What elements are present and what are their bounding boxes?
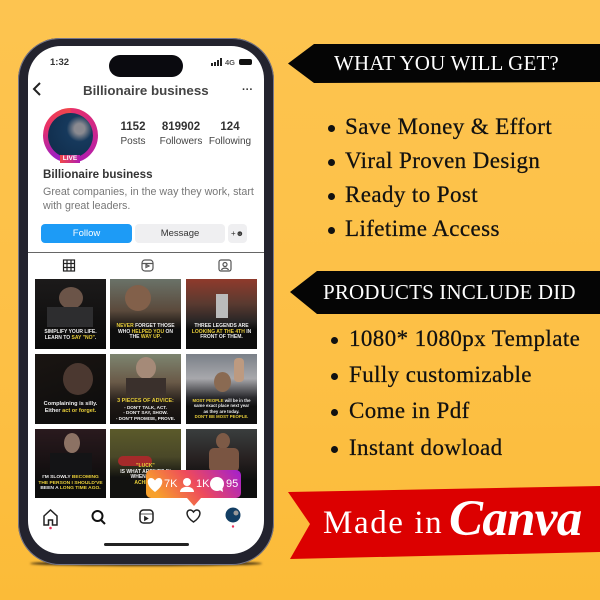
banner text: WHAT YOU WILL GET?	[334, 51, 559, 75]
bullet: template size: 1080* 1080px Template	[349, 326, 580, 351]
post 3: LOOKING AT THE 4TH IN	[192, 329, 251, 335]
profile title: Billionaire business	[83, 83, 209, 98]
post 4	[35, 354, 106, 424]
icon: home	[44, 510, 57, 529]
banner: made in canva	[288, 486, 600, 559]
phone screen	[28, 46, 264, 554]
followers count: 1K	[196, 478, 209, 490]
banner shape	[290, 271, 600, 314]
post 7: BEEN A LONG TIME AGO.	[40, 486, 101, 491]
post 3: THREE LEGENDS ARE	[194, 323, 249, 329]
benefits list	[328, 114, 552, 241]
bottom nav	[43, 508, 240, 530]
post 5: - DON'T PROMISE, PROVE.	[116, 416, 175, 421]
home indicator	[104, 543, 189, 546]
phone shadow	[30, 561, 262, 566]
tab icons	[62, 259, 232, 272]
canva text: Canva	[449, 491, 582, 547]
add friend button	[228, 224, 247, 243]
avatar photo	[48, 113, 93, 158]
post 8: IS WHAT ARRIVES IN	[120, 469, 171, 475]
post 6: same exact place next year	[194, 403, 249, 408]
post 2: NEVER FORGET THOSE	[116, 323, 175, 329]
post 5: 3 PIECES OF ADVICE:	[117, 398, 174, 404]
followers stat	[160, 121, 202, 147]
icon: heart	[187, 510, 200, 522]
post 2: THE WAY UP.	[130, 334, 161, 340]
status time: 1:32	[50, 57, 69, 68]
bullet: instant download: Instant dowload	[349, 435, 503, 460]
post 6: DON'T BE MOST PEOPLE.	[195, 414, 248, 419]
status icons: 4G	[225, 58, 235, 67]
post grid	[35, 279, 257, 498]
post 1	[35, 279, 106, 349]
post 5: - DON'T SAY, SHOW.	[123, 410, 168, 415]
bio text: Great companies, in the way they work, start	[43, 186, 254, 198]
message button	[135, 224, 225, 243]
post 8	[110, 429, 181, 498]
post 3	[186, 279, 257, 349]
bullet: customizable: Fully customizable	[349, 362, 532, 387]
following stat	[209, 121, 251, 147]
post 1: SIMPLIFY YOUR LIFE.	[44, 329, 97, 335]
likes count: 7K	[164, 478, 177, 490]
posts stat: 1152	[121, 121, 145, 133]
divider	[28, 252, 264, 253]
following stat: Following	[209, 136, 251, 147]
followers stat: Followers	[160, 136, 202, 147]
bullet: pdf: Come in Pdf	[349, 398, 470, 423]
follow button	[41, 224, 132, 243]
add friend button: +☻	[231, 229, 244, 238]
post 9	[186, 429, 257, 498]
post 5	[110, 354, 181, 424]
icon: reels	[140, 510, 153, 523]
phone body	[18, 38, 274, 565]
icon: search	[92, 511, 105, 524]
banner shape	[288, 44, 600, 83]
avatar	[43, 108, 98, 163]
post 6	[186, 354, 257, 424]
post 8: "LUCK"	[136, 463, 155, 469]
status icons	[211, 58, 252, 67]
following stat: 124	[220, 121, 240, 133]
banner: products include	[290, 271, 600, 314]
post 4: Complaining is silly.	[44, 401, 97, 407]
comments count: 95	[226, 478, 238, 490]
bio text	[43, 186, 254, 212]
bullet: lifetime access: Lifetime Access	[345, 216, 500, 241]
post 7: THE PERSON I SHOULD'VE	[38, 481, 103, 486]
bullet: viral design: Viral Proven Design	[345, 148, 540, 173]
post 7: I'M SLOWLY BECOMING	[42, 475, 99, 480]
tooltip bubble	[146, 470, 241, 506]
followers stat: 819902	[162, 121, 200, 133]
products list	[331, 326, 580, 460]
post 4: Either act or forget.	[45, 408, 96, 414]
bio name: Billionaire business	[43, 168, 153, 181]
live badge	[60, 155, 80, 163]
posts stat: Posts	[120, 136, 146, 147]
more menu: ···	[242, 84, 253, 96]
bio text: with great leaders.	[43, 200, 130, 212]
bullet: ready to post: Ready to Post	[345, 182, 478, 207]
banner: what you will get	[288, 44, 600, 83]
live badge: LIVE	[63, 155, 77, 162]
post 8: WHEN THEY	[130, 474, 160, 480]
post 5: - DON'T TALK, ACT.	[124, 405, 167, 410]
post 2: WHO HELPED YOU ON	[118, 329, 173, 335]
message button: Message	[161, 228, 199, 239]
bullet: save money: Save Money & Effort	[345, 114, 552, 139]
post 2	[110, 279, 181, 349]
icon: profile	[226, 508, 240, 528]
post 8: ACHIEVE	[134, 480, 157, 486]
banner text: PRODUCTS INCLUDE DID	[323, 280, 576, 304]
post 6: as they are today.	[204, 409, 239, 414]
engagement tooltip	[146, 470, 241, 506]
posts stat	[120, 121, 146, 147]
post 3: FRONT OF THEM.	[200, 334, 243, 340]
post 1: LEARN TO SAY "NO".	[45, 335, 96, 341]
back arrow	[32, 82, 41, 96]
ribbon shape	[288, 486, 600, 559]
post 6: MOST PEOPLE will be in the	[192, 398, 251, 403]
dynamic island	[109, 55, 183, 77]
made in text: Made in	[323, 505, 443, 541]
post 7	[35, 429, 106, 498]
follow button: Follow	[73, 228, 100, 239]
phone	[18, 38, 274, 565]
